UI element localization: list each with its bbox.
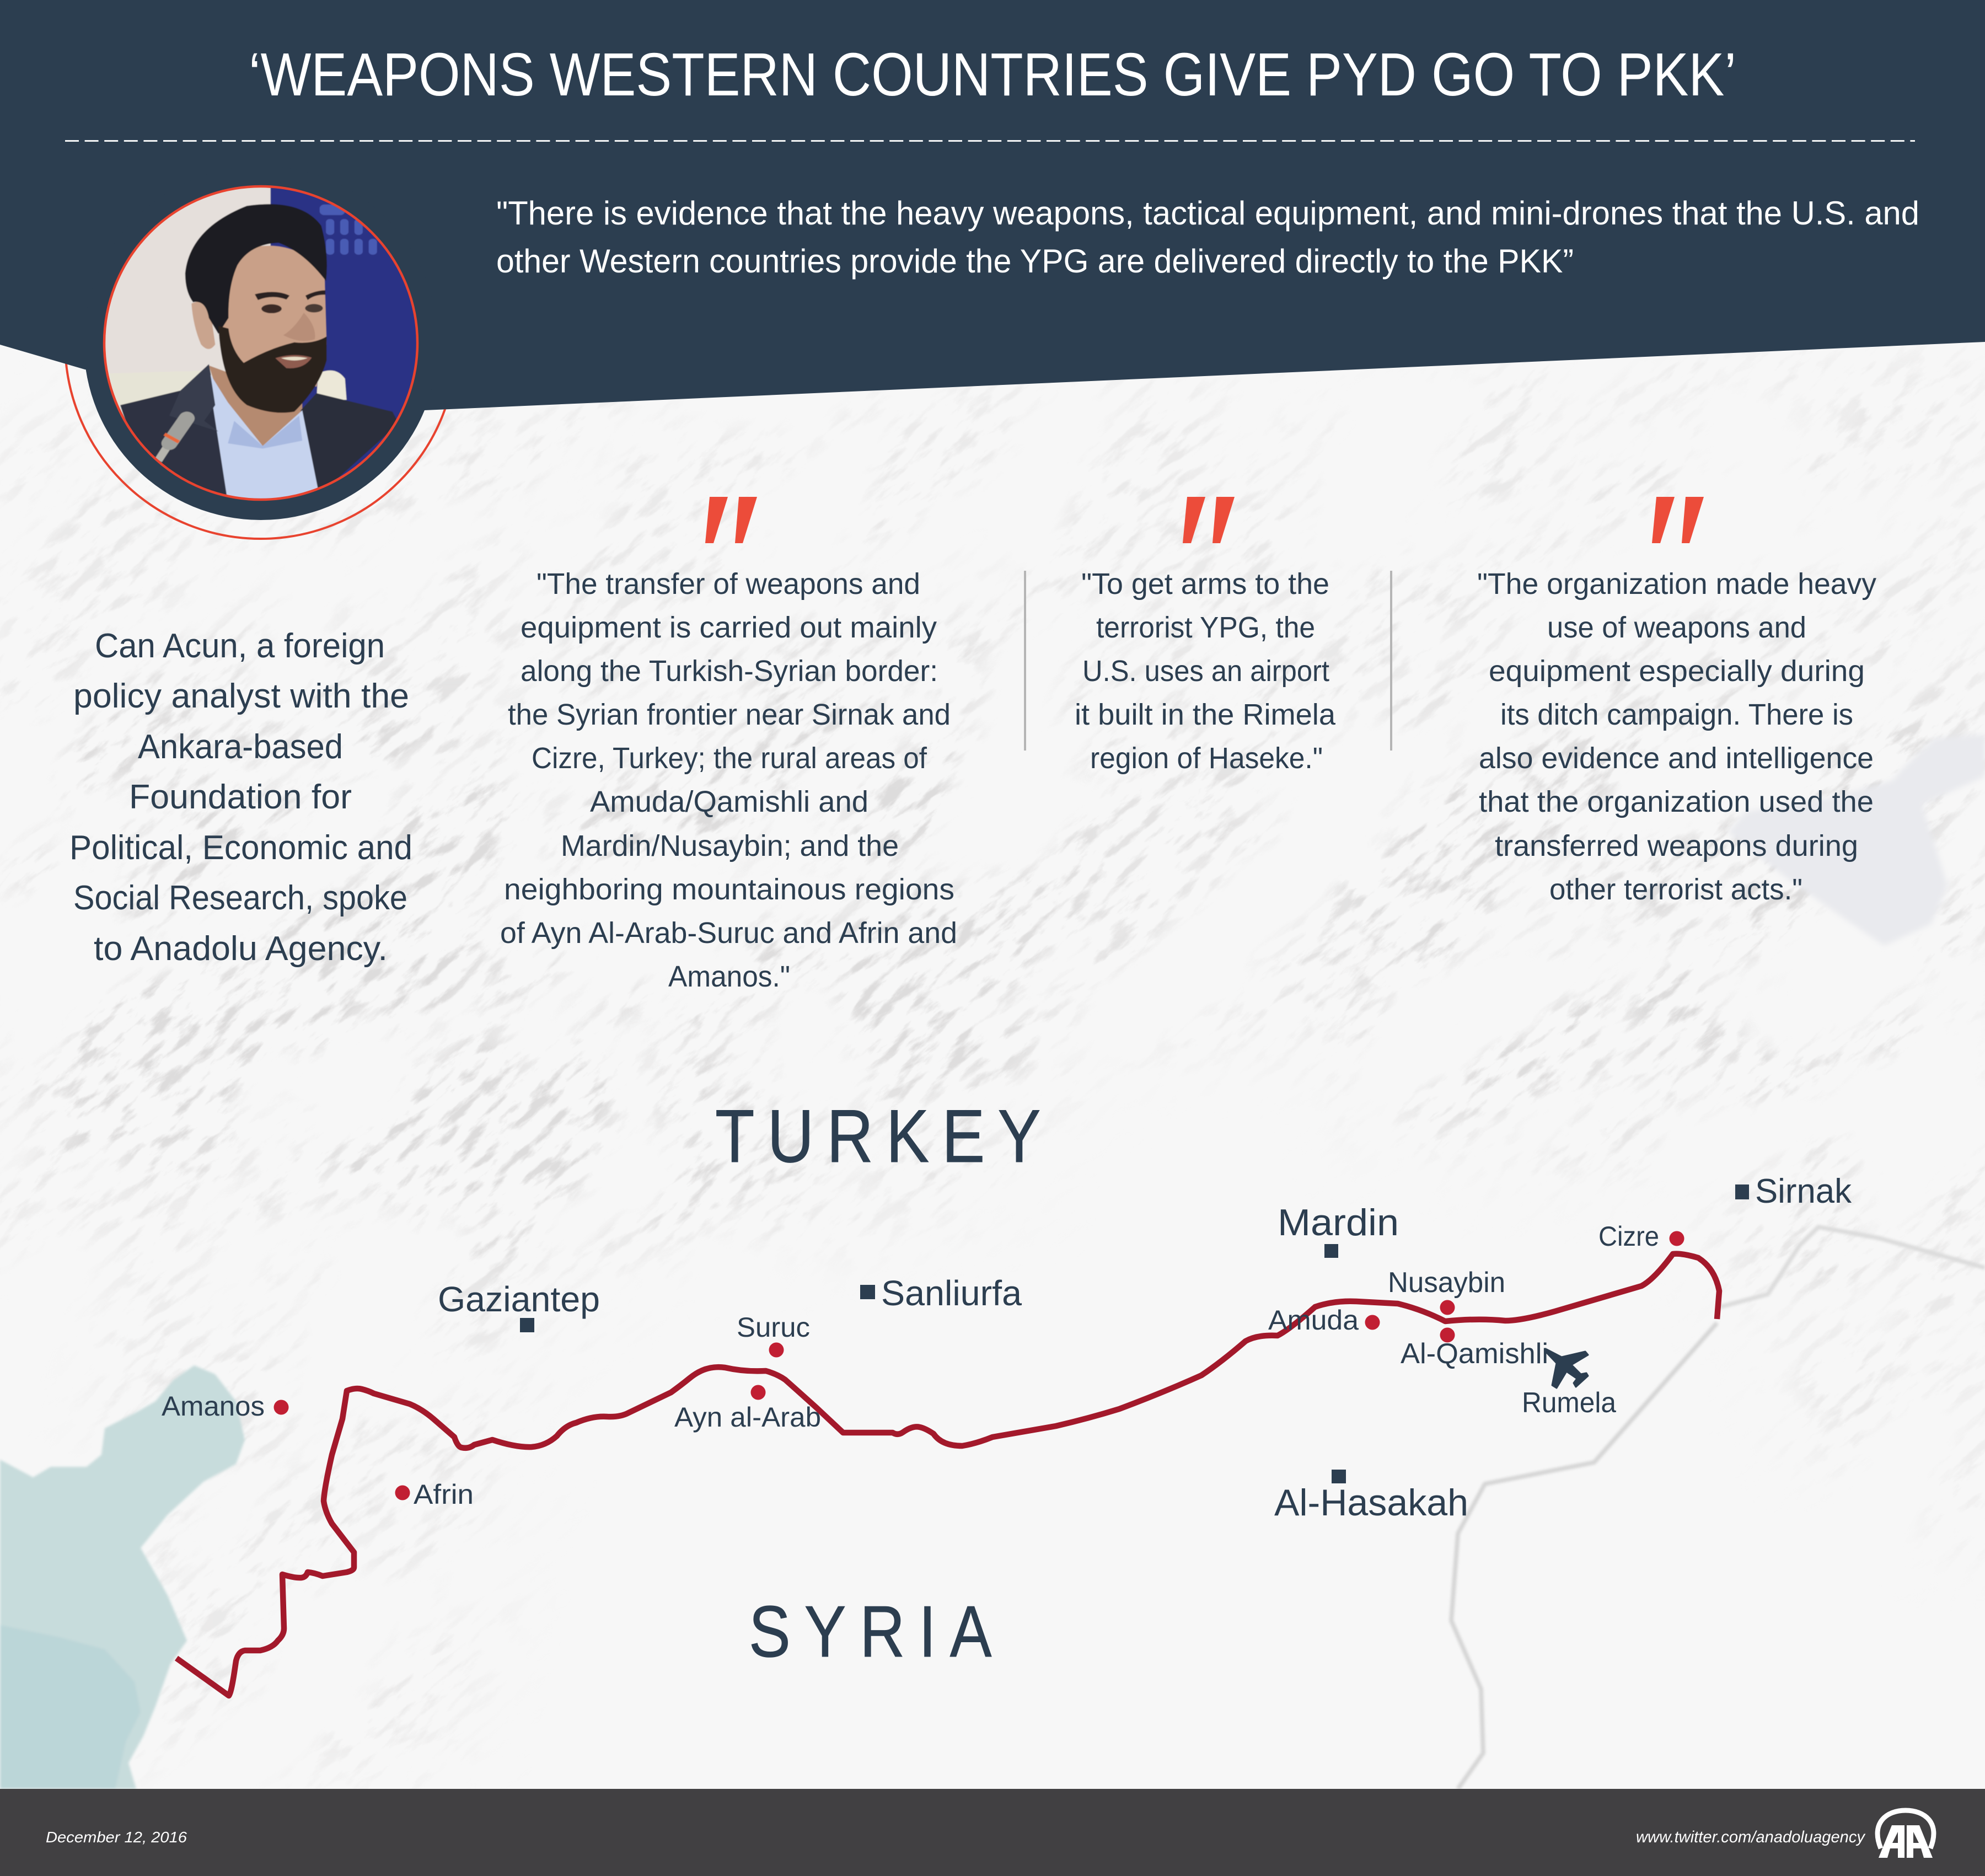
quote column 2: "To get arms to the <box>1081 567 1329 601</box>
quote column 1: the Syrian frontier near Sirnak and <box>508 698 951 731</box>
quote column 3 <box>1477 567 1876 906</box>
town: Suruc: Suruc <box>737 1312 810 1343</box>
quote column 3: equipment especially during <box>1489 655 1865 688</box>
country boundary lines in grey <box>1451 1227 1985 1789</box>
outer red ring around portrait <box>65 147 457 539</box>
intro paragraph about Can Acun: to Anadolu Agency. <box>94 930 388 968</box>
city: Gaziantep: Gaziantep <box>438 1279 600 1319</box>
town: Ayn al-Arab <box>674 1385 821 1433</box>
quote column 1: Amuda/Qamishli and <box>590 785 868 818</box>
quote column 2: U.S. uses an airport <box>1082 655 1329 688</box>
town: Al-Qamishli: Al-Qamishli <box>1401 1338 1548 1370</box>
town: Afrin: Afrin <box>414 1479 474 1510</box>
quote column 2 <box>1075 567 1336 775</box>
intro paragraph about Can Acun: Foundation for <box>129 778 352 816</box>
map background <box>0 371 1985 1755</box>
divider between columns 1 and 2 <box>1024 571 1026 751</box>
intro paragraph about Can Acun: policy analyst with the <box>73 677 409 715</box>
town: Cizre: Cizre <box>1598 1221 1659 1252</box>
quote column 3: its ditch campaign. There is <box>1500 698 1853 731</box>
Turkey-Syria border line <box>176 1254 1719 1696</box>
quote column 3: other terrorist acts." <box>1549 873 1802 906</box>
town: Suruc <box>737 1312 810 1358</box>
navy circle behind portrait <box>84 166 438 520</box>
quote column 1: of Ayn Al-Arab-Suruc and Afrin and <box>500 916 957 950</box>
town: Ayn al-Arab: Ayn al-Arab <box>674 1402 821 1433</box>
quote column 1: along the Turkish-Syrian border: <box>521 655 938 688</box>
label: SYRIA: SYRIA <box>749 1591 1005 1673</box>
quote column 1 <box>500 567 957 993</box>
quote column 1: neighboring mountainous regions <box>504 873 954 906</box>
city: Sirnak: Sirnak <box>1755 1172 1852 1210</box>
label: TURKEY: TURKEY <box>715 1094 1054 1178</box>
header quote <box>496 195 1919 280</box>
date: December 12, 2016 <box>46 1829 187 1846</box>
icon: Anadolu Agency logo <box>1877 1810 1934 1858</box>
label: Rumela: Rumela <box>1522 1387 1616 1419</box>
intro paragraph about Can Acun: Ankara-based <box>138 728 343 766</box>
icon: quote mark column 2 <box>1183 497 1235 543</box>
intro paragraph about Can Acun: Can Acun, a foreign <box>95 627 385 665</box>
town: Amanos: Amanos <box>162 1391 265 1422</box>
quote column 3: that the organization used the <box>1479 785 1874 818</box>
quote column 1: "The transfer of weapons and <box>537 567 920 601</box>
quote column 1: Amanos." <box>668 960 790 993</box>
quote column 2: terrorist YPG, the <box>1096 611 1315 644</box>
town: Amuda: Amuda <box>1268 1305 1359 1336</box>
icon: quote mark column 1 <box>705 497 757 543</box>
city: Mardin: Mardin <box>1278 1202 1399 1243</box>
city: Sanliurfa: Sanliurfa <box>881 1273 1022 1313</box>
icon: quote mark column 3 <box>1652 497 1704 543</box>
quote column 3: also evidence and intelligence <box>1479 742 1874 775</box>
town: Nusaybin <box>1388 1267 1505 1315</box>
twitter address: www.twitter.com/anadoluagency <box>1636 1828 1866 1846</box>
title: ‘WEAPONS WESTERN COUNTRIES GIVE PYD GO TO PKK’ <box>249 41 1736 109</box>
quote column 2: region of Haseke." <box>1090 742 1323 775</box>
intro paragraph about Can Acun <box>69 627 412 968</box>
quote column 3: use of weapons and <box>1547 611 1806 644</box>
header dashed rule <box>65 140 1915 142</box>
footer bar <box>0 1789 1985 1876</box>
quote column 2: it built in the Rimela <box>1075 698 1336 731</box>
lake in the north-east <box>1728 735 1985 946</box>
divider between columns 2 and 3 <box>1390 571 1392 751</box>
town: Nusaybin: Nusaybin <box>1388 1267 1505 1299</box>
city: Al-Hasakah: Al-Hasakah <box>1274 1482 1468 1524</box>
quote column 1: Cizre, Turkey; the rural areas of <box>532 742 927 775</box>
sea: Mediterranean coast <box>0 1365 245 1789</box>
intro paragraph about Can Acun: Social Research, spoke <box>73 879 407 917</box>
quote column 1: Mardin/Nusaybin; and the <box>561 829 899 862</box>
header quote: "There is evidence that the heavy weapons, tactical equipment, and mini-drones that the U.S. and <box>496 195 1919 232</box>
icon: airplane at Rumela <box>1546 1349 1588 1388</box>
quote column 3: transferred weapons during <box>1495 829 1858 862</box>
portrait of Can Acun <box>104 186 418 503</box>
quote column 3: "The organization made heavy <box>1477 567 1876 601</box>
header quote: other Western countries provide the YPG are delivered directly to the PKK” <box>496 243 1574 280</box>
quote column 1: equipment is carried out mainly <box>521 611 937 644</box>
header banner <box>0 0 1985 410</box>
intro paragraph about Can Acun: Political, Economic and <box>69 829 412 867</box>
